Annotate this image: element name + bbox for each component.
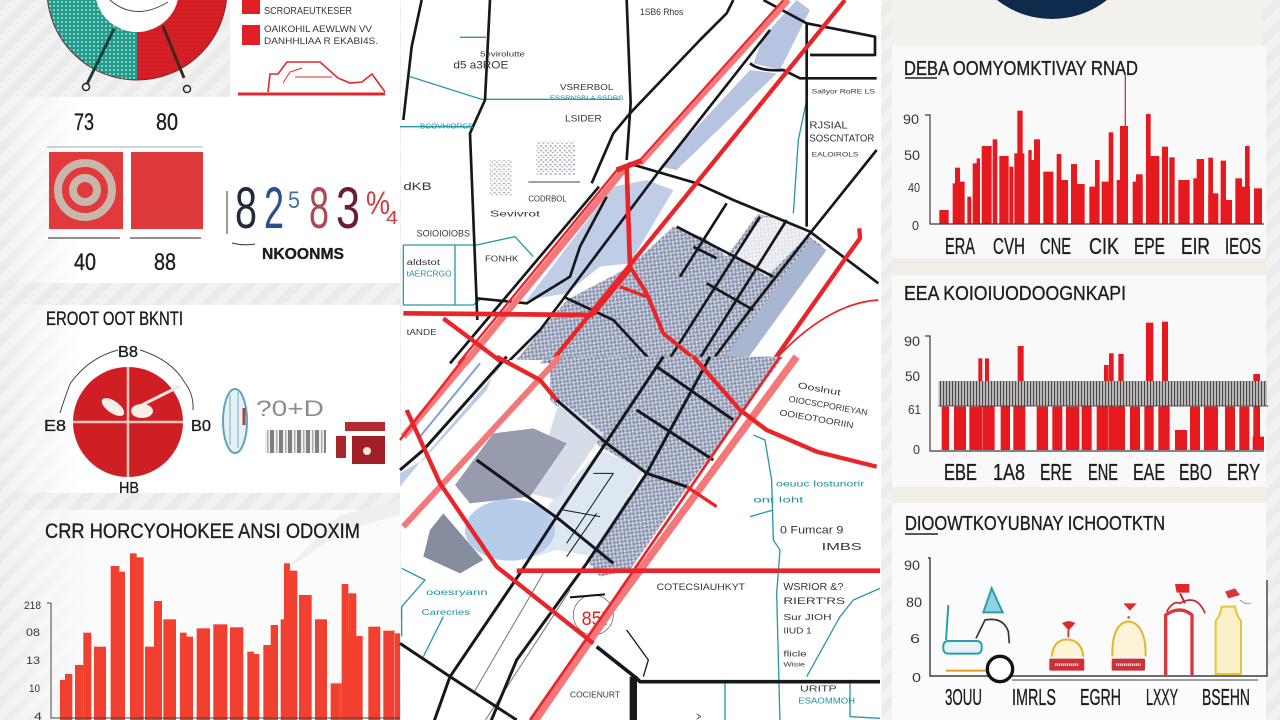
bar chart [939, 73, 1262, 224]
panel: stat tiles [0, 97, 400, 283]
map labels: flicle [783, 650, 807, 659]
gauge labels: E8 [44, 418, 66, 435]
city, lake and dark land fills [400, 357, 783, 577]
big number: 5 [288, 187, 300, 214]
panel: central transit map [400, 0, 881, 720]
icon: bottle [1216, 588, 1251, 674]
map labels: Carecries [422, 607, 471, 617]
axis and ticks: 6 [910, 631, 920, 646]
gauge labels: HB [119, 480, 139, 497]
axis and ticks: 08 [26, 627, 40, 639]
x labels: ERY [1227, 459, 1260, 485]
axis and ticks: 50 [905, 368, 920, 384]
icon: navy disc [963, 0, 1141, 19]
map labels: IIUD 1 [783, 626, 812, 635]
big number: % [366, 185, 390, 221]
map labels: Ooslnut [797, 380, 842, 398]
axis and ticks: 13 [26, 655, 40, 667]
map labels: RIERT'RS [783, 596, 845, 606]
map upper half [400, 0, 880, 363]
map labels: Wisie [783, 662, 805, 669]
axis and ticks [904, 557, 1267, 685]
callout text: ?0+D [256, 396, 324, 421]
axis and ticks: 50 [904, 147, 920, 163]
big number: 2 [264, 176, 284, 241]
map labels: tAERCRGO [407, 270, 452, 279]
x labels: EBE [944, 459, 977, 485]
map labels: LSIDER [565, 114, 602, 124]
label 40: 40 [74, 249, 96, 276]
panel: gauge [0, 305, 400, 497]
label 73: 73 [74, 109, 94, 136]
axis and ticks: 80 [906, 594, 922, 610]
icon: target tile [49, 152, 123, 229]
x labels: CVH [993, 233, 1025, 259]
red highways [403, 0, 878, 363]
map labels: aldstot [407, 258, 441, 267]
axis and ticks: 90 [904, 557, 920, 573]
x labels: CIK [1089, 233, 1120, 259]
map labels [403, 7, 876, 337]
axis and ticks [903, 111, 1264, 233]
map labels: URITP [800, 685, 837, 694]
map labels: RJSIAL [809, 120, 848, 131]
x labels: ERA [945, 233, 975, 259]
caption: NKOONMS [262, 246, 344, 263]
map labels: VSRERBOL [560, 83, 614, 92]
icon: route shield [570, 594, 613, 635]
red highways [400, 357, 880, 720]
gauge labels: B8 [118, 344, 138, 361]
heading: CRR HORCYOHOKEE ANSI ODOXIM [45, 520, 360, 543]
x labels: EPE [1134, 233, 1165, 259]
x labels: EAE [1133, 459, 1165, 485]
map labels: OIOCSCPORIEYAN [788, 394, 868, 417]
teal lines [402, 435, 880, 720]
map labels: SOIOIOIOBS [417, 229, 470, 239]
x labels: ENE [1088, 459, 1118, 485]
barcode band [938, 381, 1267, 406]
map labels: EALOIROLS [812, 153, 858, 159]
icon: capsule [223, 389, 247, 453]
pictogram shapes [943, 584, 1251, 682]
axis and ticks: 61 [908, 402, 921, 417]
gauge circle [60, 350, 193, 477]
black roads [400, 357, 880, 720]
x labels [945, 684, 1250, 710]
axis and ticks: 40 [908, 180, 920, 195]
map labels [422, 378, 871, 720]
axis and ticks: 218 [24, 600, 41, 612]
icon: route shield: 857 [582, 609, 612, 630]
map labels: CODRBOL [528, 195, 567, 204]
icon: tank 1 [1049, 622, 1084, 671]
map labels: ESSRNSBLA SSDRS [550, 95, 624, 102]
panel: top-left donut and legend [47, 0, 400, 97]
axis and ticks: 90 [904, 333, 920, 349]
map labels: ESAOMMOH [798, 696, 855, 705]
teal lines [400, 37, 807, 305]
icon: red seal [336, 422, 385, 464]
x labels: IMRLS [1012, 684, 1056, 710]
map labels: IMBS [822, 542, 862, 553]
map labels: d5 a3ROE [453, 59, 508, 71]
legend [242, 0, 378, 47]
map labels: 0 Fumcar 9 [780, 524, 843, 536]
panel: right chart 1 [892, 46, 1266, 259]
axis and ticks [904, 333, 1264, 457]
axis and ticks: 0 [912, 670, 921, 685]
x labels [944, 459, 1260, 485]
donut chart [47, 0, 227, 92]
map labels: WSRIOR &? [783, 582, 844, 593]
icon: tank 2 [1112, 603, 1146, 671]
gauge labels [44, 344, 211, 497]
map labels: COTECSIAUHKYT [657, 582, 745, 592]
map labels: ooesryann [426, 587, 488, 597]
river and district fills [513, 0, 880, 363]
black roads [403, 0, 878, 363]
map labels: ont Ioht [753, 496, 805, 505]
label 80: 80 [156, 109, 178, 136]
map labels: FONHK [485, 255, 519, 264]
x labels: CNE [1040, 233, 1071, 259]
legend: SCRORAEUTKESER [264, 6, 352, 17]
big number: 8 [235, 176, 257, 241]
panel: bottom-left bar chart [0, 500, 400, 720]
heading: DEBA OOMYOMKTIVAY RNAD [904, 58, 1138, 80]
x labels: IEOS [1225, 233, 1261, 259]
map labels: tANDE [407, 328, 437, 337]
x labels [945, 233, 1261, 259]
panel: right chart 3 pictogram [892, 503, 1267, 720]
icon: column [1166, 584, 1205, 675]
x labels: LXXY [1146, 684, 1178, 710]
callout text [256, 396, 326, 453]
big number [227, 176, 398, 245]
bar chart [938, 322, 1268, 450]
legend: OAIKOHIL AEWLWN VV [264, 24, 372, 34]
big number: 3 [336, 176, 360, 241]
map labels: SOSCNTATOR [809, 134, 874, 145]
x labels: 1A8 [993, 459, 1025, 485]
map lower half [400, 357, 880, 720]
axis and ticks: 0 [913, 442, 920, 457]
axis and ticks: 10 [29, 683, 40, 695]
label 88: 88 [154, 249, 176, 276]
map labels: dKB [403, 181, 432, 193]
panel: right chart 2 [892, 275, 1268, 487]
x labels: EGRH [1080, 684, 1121, 710]
x labels: 3OUU [945, 684, 982, 710]
map labels: oeuuc Iostunorir [776, 480, 865, 489]
x labels: ERE [1040, 459, 1072, 485]
legend: DANHHLIAA R EKABI4S. [264, 36, 378, 47]
bar chart [60, 553, 400, 720]
heading: EROOT OOT BKNTI [46, 309, 183, 330]
map labels: 5evirolutte [480, 50, 525, 59]
gauge labels: B0 [191, 418, 211, 435]
x labels: EBO [1179, 459, 1212, 485]
red square tile [131, 152, 203, 229]
big number: 8 [309, 176, 329, 241]
x labels: EIR [1181, 233, 1210, 259]
axis and ticks: 0 [912, 218, 919, 233]
map labels: Sur JIOH [783, 613, 832, 622]
big number: 4 [386, 208, 398, 228]
x labels: BSEHN [1202, 684, 1250, 710]
red line sketch [238, 62, 385, 94]
axis and ticks [24, 600, 400, 720]
map labels: COCIENURT [570, 689, 621, 699]
map labels: Sallyor RoRE LS [812, 88, 876, 95]
axis and ticks: 90 [903, 111, 919, 127]
panel: right paper strips and navy circle [892, 0, 1266, 503]
map labels: Sevivrot [490, 209, 541, 219]
icon: forklift [943, 588, 1013, 682]
map labels: 1SB6 Rhos [640, 7, 684, 17]
map labels: OOIEOTOORIIN [779, 407, 854, 430]
heading: EEA KOIOIUODOOGNKAPI [904, 283, 1126, 305]
map labels: BCOVHIORCS [420, 121, 473, 130]
heading: DIOOWTKOYUBNAY ICHOOTKTN [905, 513, 1165, 535]
